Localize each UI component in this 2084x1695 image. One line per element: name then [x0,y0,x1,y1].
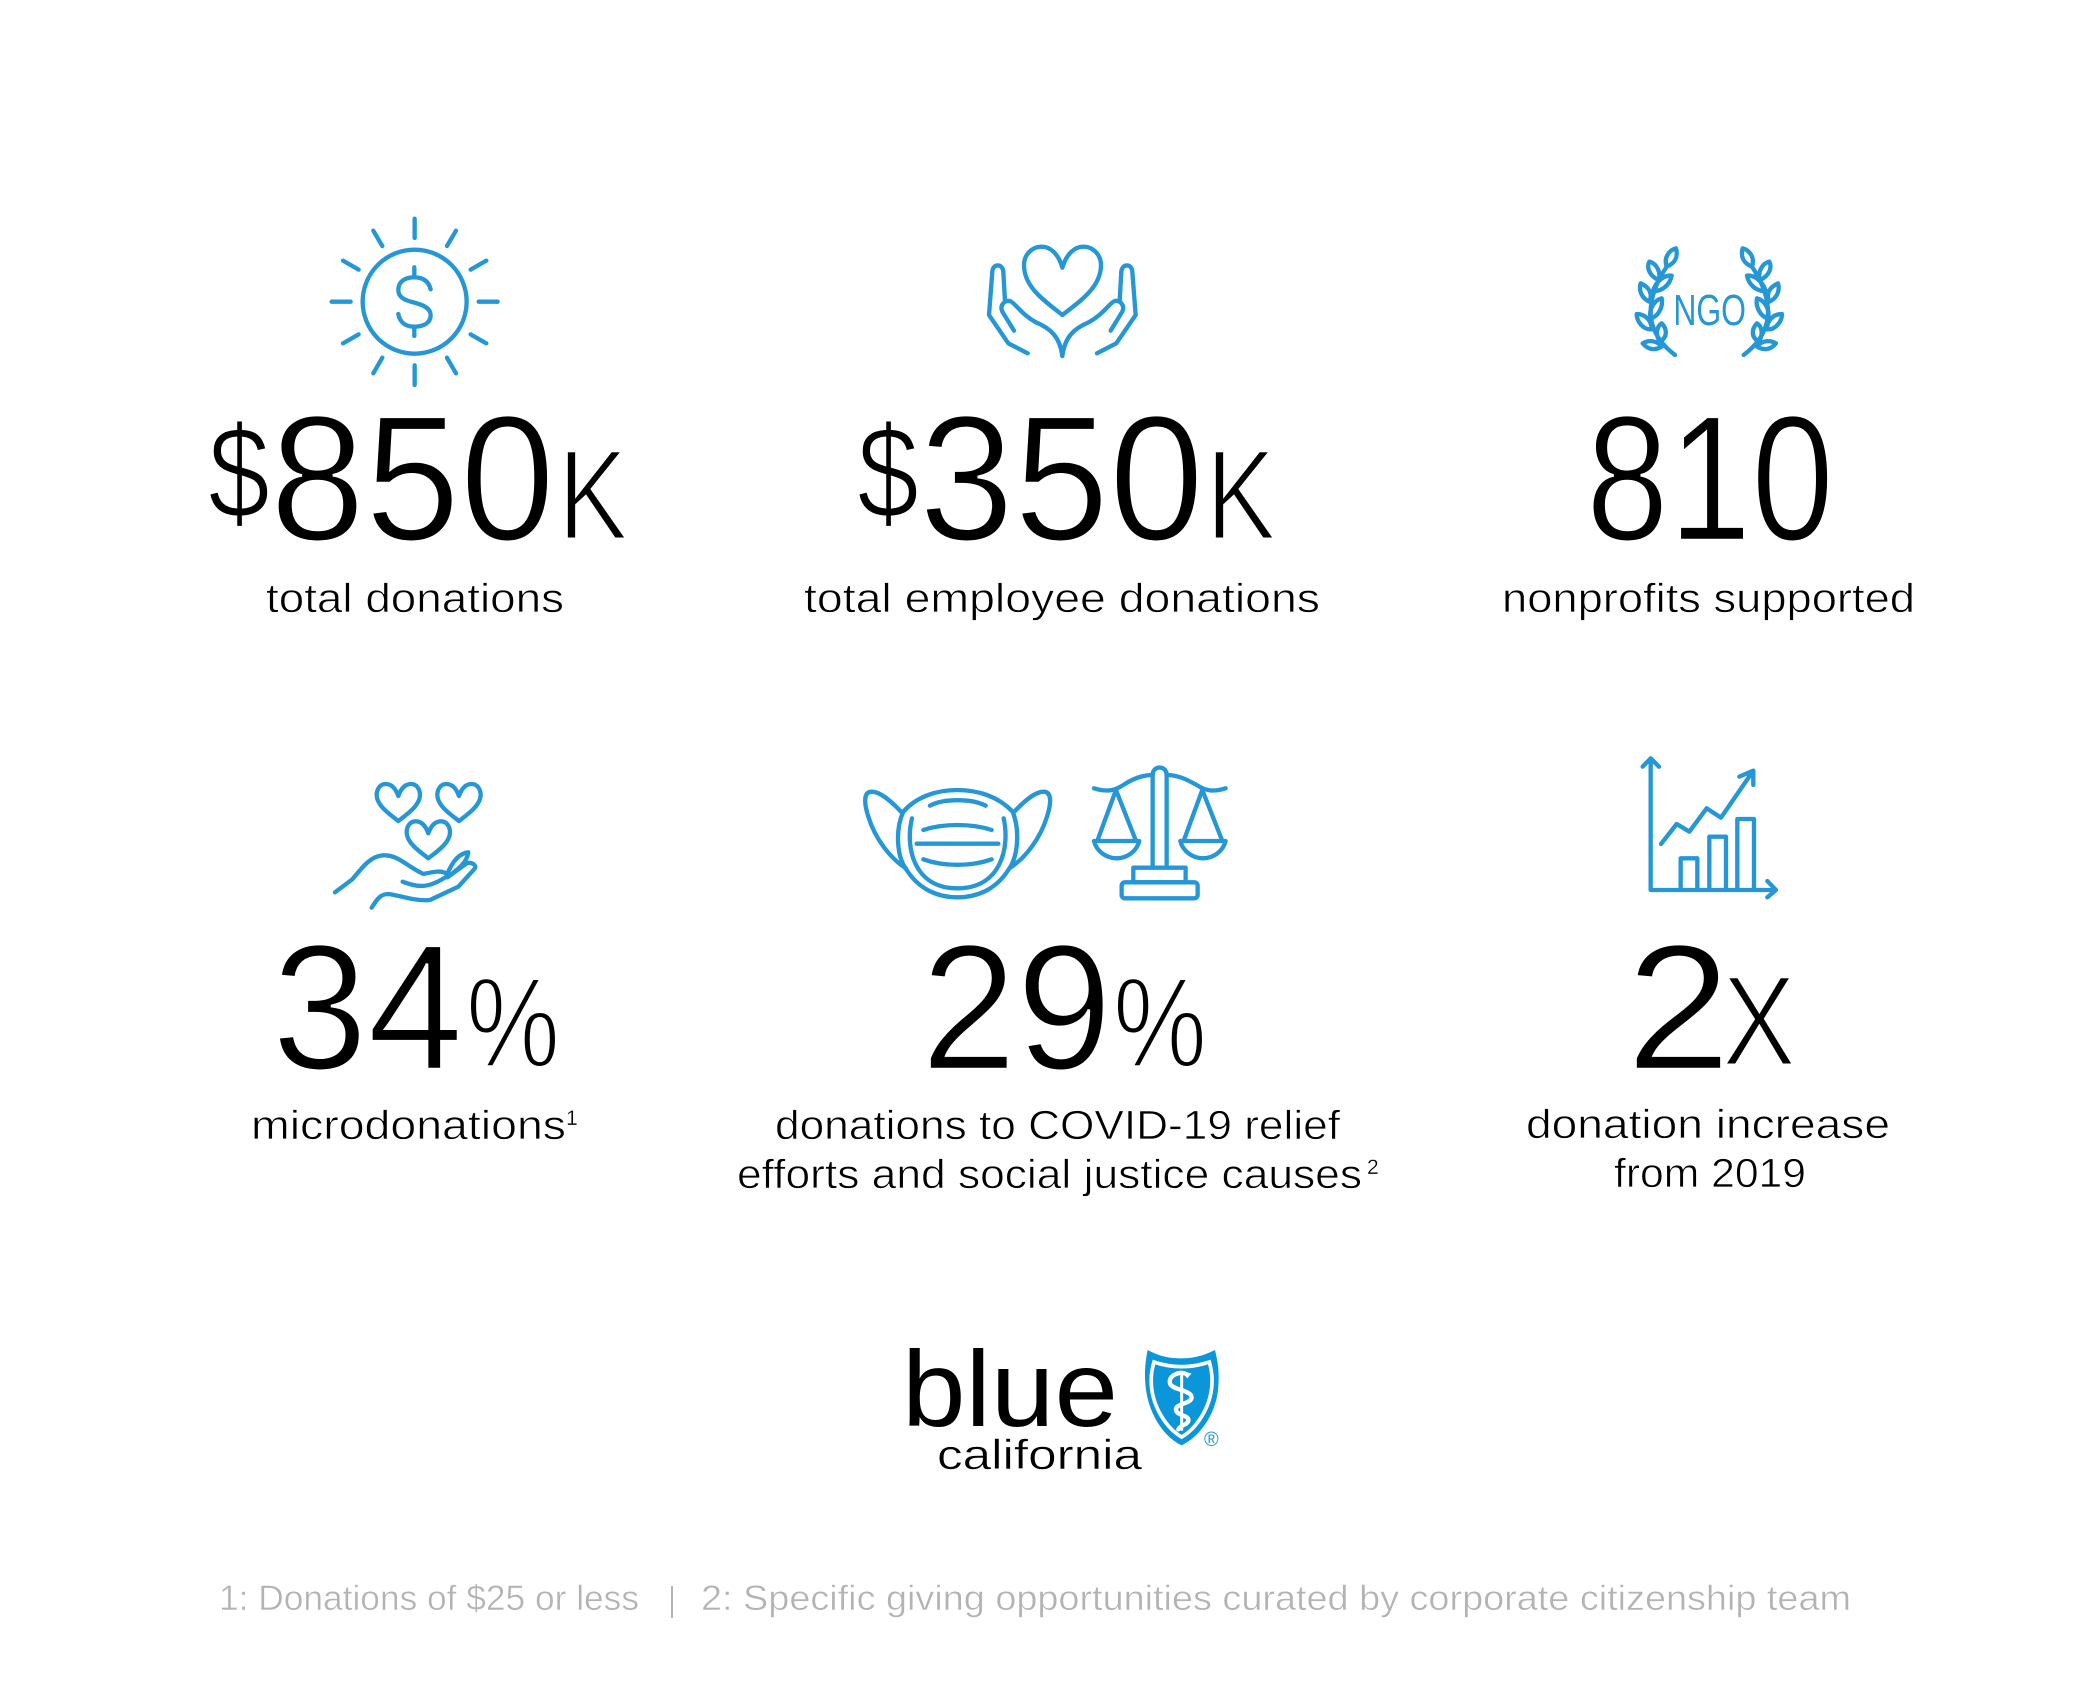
icon: rising bar chart [1643,758,1776,897]
registered mark: ® [1204,1429,1219,1451]
wordmark: blue [902,1328,1118,1449]
panel: COVID-19 relief and social justice [737,767,1379,1197]
footnotes [219,1579,1851,1618]
label: donations to COVID-19 relief and social justice causes: efforts and social justice causes [737,1151,1362,1197]
panel: donation increase [1526,758,1890,1196]
icon: face mask [865,790,1050,897]
big number: $350K: 350 [919,378,1204,578]
label: microdonations with footnote 1: microdonations [251,1102,566,1148]
label: donation increase from 2019 [1526,1101,1890,1196]
icon: blue shield [1145,1350,1219,1445]
big number: 29% [921,907,1207,1107]
logo: blue california [902,1328,1219,1478]
label: donations to COVID-19 relief and social justice causes: 2 [1367,1156,1379,1179]
label: microdonations with footnote 1: 1 [566,1107,578,1130]
panel: total donations [208,219,628,621]
label: donations to COVID-19 relief and social justice causes: donations to COVID-19 relief [775,1102,1341,1148]
big number: 34%: % [466,952,560,1095]
big number: 34%: 34 [272,907,463,1107]
big number: 2x: X [1722,950,1796,1093]
big number: $850K: $ [208,399,270,546]
big number: 2x [1626,907,1796,1107]
icon: hands holding heart [989,247,1136,356]
big number: $350K: K [1206,424,1276,567]
big number: 810: 810 [1586,378,1834,578]
icon: hand with three hearts [335,784,481,908]
icon: scales of justice [1094,767,1226,898]
icon: NGO laurel wreath: NGO [1673,287,1746,335]
big number: 29%: 29 [921,907,1112,1107]
label: donation increase from 2019: donation increase [1526,1101,1890,1147]
label: total donations: total donations [266,575,564,621]
panel: total employee donations [804,247,1320,621]
big number: 2x: 2 [1626,907,1731,1107]
wordmark: california [937,1431,1143,1478]
footnotes: 1: Donations of $25 or less [219,1579,639,1618]
icon: sun with dollar coin [332,219,498,385]
panel: microdonations [251,784,578,1148]
big number: $850K: 850 [270,378,555,578]
wordmark [902,1328,1143,1478]
panel: nonprofits supported [1502,248,1915,621]
label: total employee donations: total employee donations [804,575,1320,621]
big number: $350K: $ [857,399,919,546]
big number: 29%: % [1113,952,1207,1095]
icon: NGO laurel wreath [1637,248,1782,355]
label: donation increase from 2019: from 2019 [1614,1150,1806,1196]
label: donations to COVID-19 relief and social justice causes [737,1102,1379,1197]
footnotes: 2: Specific giving opportunities curated by corporate citizenship team [701,1579,1851,1618]
big number: $850K: K [558,424,628,567]
big number: 34% [272,907,560,1107]
label: nonprofits supported: nonprofits supported [1502,575,1915,621]
